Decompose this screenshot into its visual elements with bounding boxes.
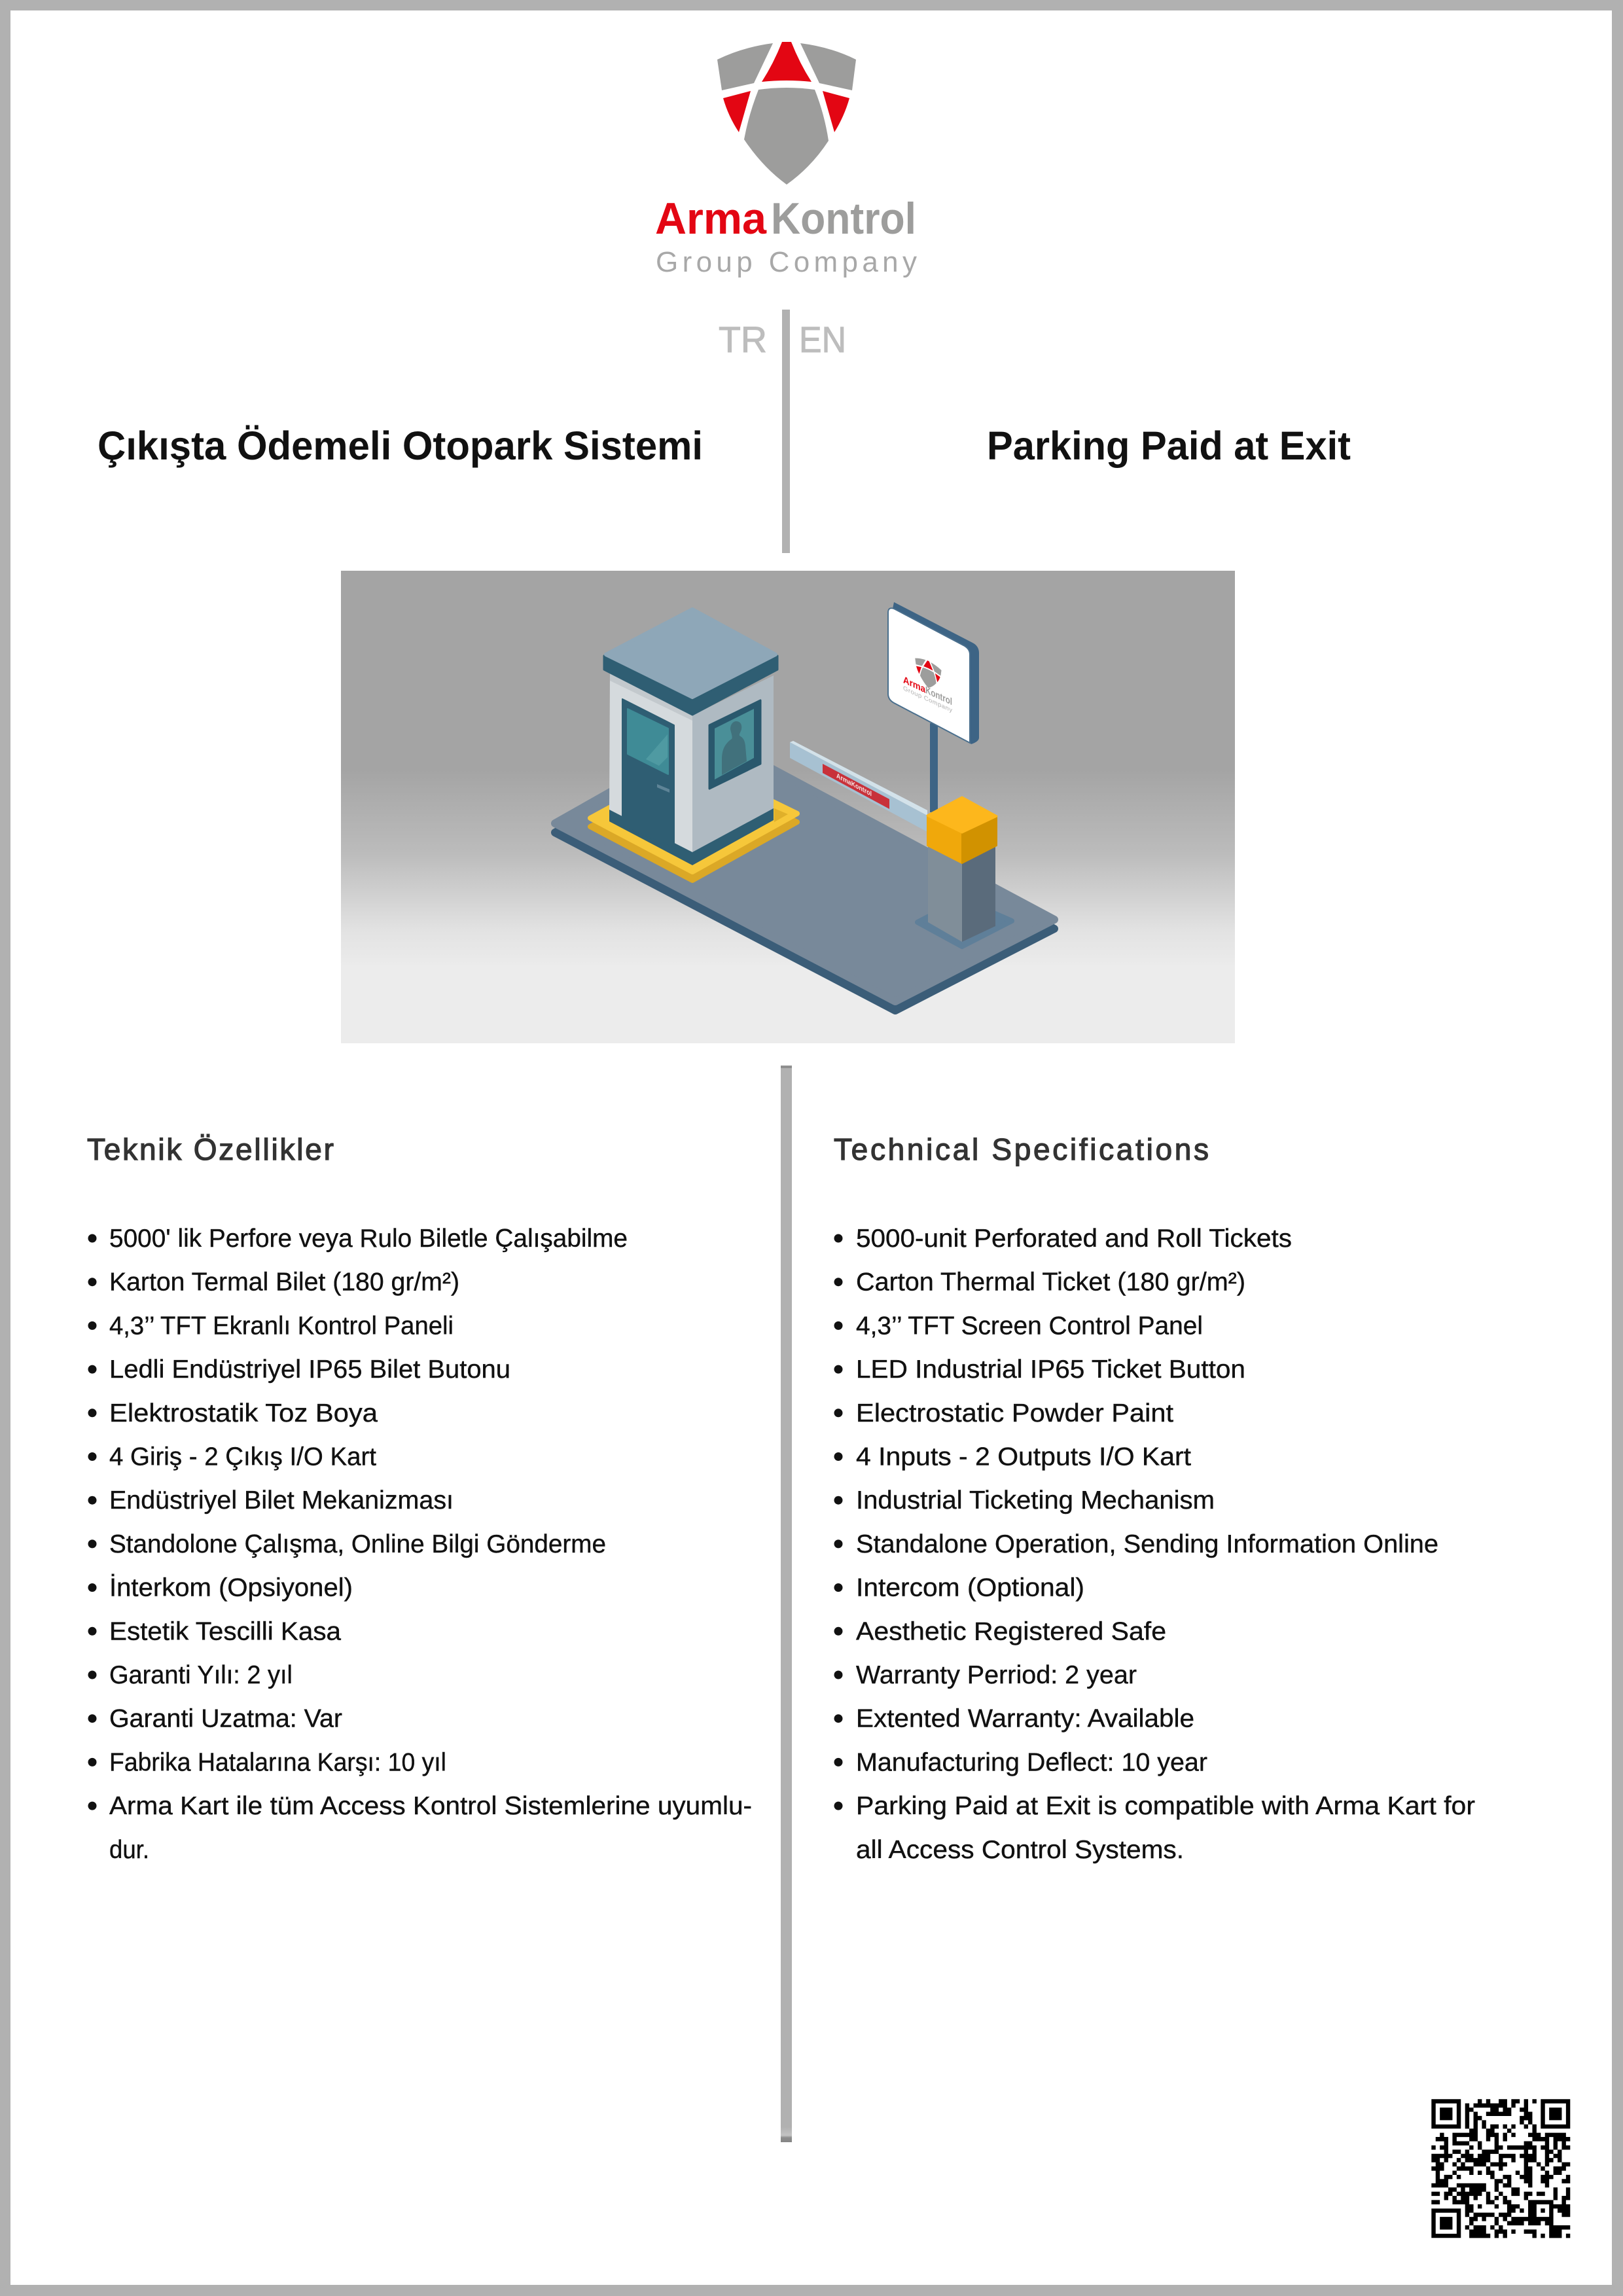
bullet list: Turkish: dur. [109, 1836, 149, 1864]
bullet list: English: Parking Paid at Exit is compatible with Arma Kart for [856, 1792, 1475, 1820]
panel: English technical specifications [834, 1132, 1475, 1864]
bottom divider [781, 1066, 792, 2142]
illustration: parking booth and barrier [341, 571, 1235, 1043]
top divider [782, 310, 790, 553]
sign logo: Kontrol [925, 685, 952, 708]
QR code [1431, 2099, 1570, 2238]
bullet list: Turkish: Fabrika Hatalarına Karşı: 10 yıl [109, 1748, 446, 1776]
bullet list: English: 4,3’’ TFT Screen Control Panel [856, 1312, 1203, 1340]
bullet list: English: Intercom (Optional) [856, 1574, 1084, 1602]
sign logo: Arma [903, 675, 925, 696]
bullet list: Turkish: Ledli Endüstriyel IP65 Bilet Butonu [109, 1355, 510, 1384]
bullet list: English: Warranty Perriod: 2 year [856, 1661, 1137, 1689]
bullet list: Turkish: Garanti Yılı: 2 yıl [109, 1661, 293, 1689]
bullet list: English: Carton Thermal Ticket (180 gr/m²) [856, 1268, 1245, 1297]
logo: Arma Kontrol Group Company [655, 42, 917, 278]
right wall [692, 675, 774, 852]
barrier arm: ArmaKontrol [836, 772, 872, 798]
barrier arm [790, 741, 927, 832]
bullet list: Turkish: 5000' lik Perfore veya Rulo Biletle Çalışabilme [109, 1225, 628, 1253]
bullet list: Turkish: Estetik Tescilli Kasa [109, 1617, 341, 1645]
language label EN: EN [799, 319, 846, 360]
bullet list: Turkish: İnterkom (Opsiyonel) [109, 1574, 353, 1602]
left wall [609, 675, 692, 852]
bullet list: English: all Access Control Systems. [856, 1836, 1184, 1864]
barrier column [927, 797, 997, 942]
booth window with operator silhouette [709, 700, 760, 789]
logo wordmark [655, 194, 916, 243]
title: Turkish: Çıkışta Ödemeli Otopark Sistemi [98, 423, 703, 468]
panel: Turkish technical specifications [87, 1132, 752, 1864]
bullet list: English: Manufacturing Deflect: 10 year [856, 1748, 1207, 1776]
bullet list: English: Standalone Operation, Sending Information Online [856, 1530, 1438, 1558]
bullet list: Turkish: 4 Giriş - 2 Çıkış I/O Kart [109, 1443, 376, 1471]
heading: Technical Specifications: Technical Specifications [834, 1132, 1209, 1166]
bullet list: English: 5000-unit Perforated and Roll Tickets [856, 1225, 1292, 1253]
sign logo: Group Company [903, 685, 952, 714]
bullet list: English: 4 Inputs - 2 Outputs I/O Kart [856, 1443, 1191, 1471]
column foot pad [918, 899, 1012, 946]
bullet list: English [834, 1225, 1475, 1864]
bullet list: Turkish: 4,3’’ TFT Ekranlı Kontrol Paneli [109, 1312, 454, 1340]
bullet list: Turkish: Arma Kart ile tüm Access Kontrol Sistemlerine uyumlu- [109, 1792, 752, 1820]
bullet list: English: Industrial Ticketing Mechanism [856, 1486, 1215, 1515]
logo wordmark: Arma [655, 194, 767, 243]
roof [604, 609, 777, 715]
bullet list: Turkish: Garanti Uzatma: Var [109, 1705, 342, 1733]
sign post [930, 723, 938, 812]
title: English: Parking Paid at Exit [987, 423, 1351, 468]
logo tagline: Group Company [656, 246, 917, 278]
bullet list: Turkish: Karton Termal Bilet (180 gr/m²) [109, 1268, 459, 1297]
bullet list: Turkish [88, 1225, 752, 1864]
icon: shield [717, 42, 856, 185]
heading: Teknik Özellikler: Teknik Özellikler [87, 1132, 334, 1166]
bullet list: English: Aesthetic Registered Safe [856, 1617, 1166, 1645]
booth plinth [609, 807, 774, 865]
door [622, 699, 674, 848]
bullet list: English: LED Industrial IP65 Ticket Button [856, 1355, 1245, 1384]
bullet list: Turkish: Standolone Çalışma, Online Bilgi Gönderme [109, 1530, 606, 1558]
bullet list: English: Electrostatic Powder Paint [856, 1399, 1173, 1427]
illustration background [341, 571, 1235, 1043]
booth [590, 609, 797, 880]
yellow base [590, 762, 797, 880]
sign board with logo [888, 602, 979, 744]
logo wordmark: Kontrol [771, 194, 916, 243]
language label TR: TR [719, 319, 767, 360]
sign logo [903, 655, 952, 714]
bullet list: English: Extented Warranty: Available [856, 1705, 1194, 1733]
ground slab [555, 736, 1054, 1011]
bullet list: Turkish: Elektrostatik Toz Boya [109, 1399, 378, 1427]
bullet list: Turkish: Endüstriyel Bilet Mekanizması [109, 1486, 454, 1515]
